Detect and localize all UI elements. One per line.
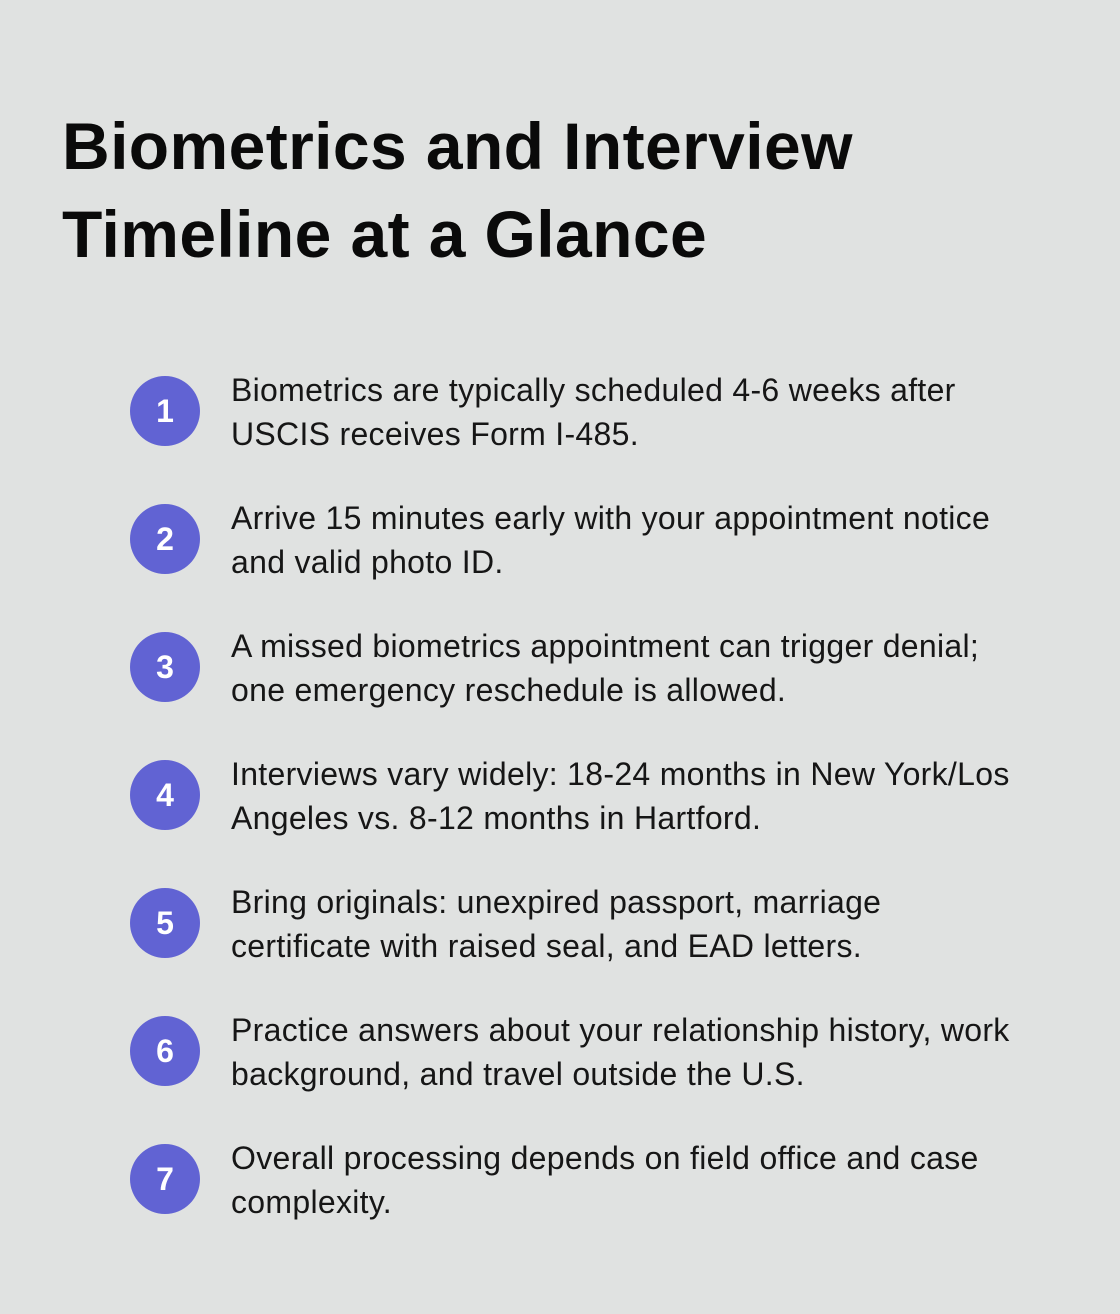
item 6 bbox=[130, 1012, 1010, 1092]
icon: number 6: 6 bbox=[156, 1033, 174, 1069]
icon: number 3: 3 bbox=[156, 649, 174, 685]
item 7: complexity. bbox=[231, 1184, 392, 1220]
item 7: Overall processing depends on field office and case bbox=[231, 1140, 979, 1176]
icon: number 5 bbox=[130, 888, 200, 958]
item 2: and valid photo ID. bbox=[231, 544, 504, 580]
item 1: Biometrics are typically scheduled 4-6 weeks after bbox=[231, 372, 956, 408]
icon: number 4 bbox=[130, 760, 200, 830]
item 4: Interviews vary widely: 18-24 months in New York/Los bbox=[231, 756, 1010, 792]
item 5: Bring originals: unexpired passport, marriage bbox=[231, 884, 881, 920]
item 3 bbox=[130, 628, 979, 708]
item 4: Angeles vs. 8-12 months in Hartford. bbox=[231, 800, 761, 836]
item 5: certificate with raised seal, and EAD letters. bbox=[231, 928, 862, 964]
item 3: A missed biometrics appointment can trigger denial; bbox=[231, 628, 979, 664]
item 3: one emergency reschedule is allowed. bbox=[231, 672, 786, 708]
item 6: Practice answers about your relationship history, work bbox=[231, 1012, 1010, 1048]
icon: number 4: 4 bbox=[156, 777, 174, 813]
icon: number 7: 7 bbox=[156, 1161, 174, 1197]
icon: number 7 bbox=[130, 1144, 200, 1214]
item 2 bbox=[130, 500, 990, 580]
item 1: USCIS receives Form I-485. bbox=[231, 416, 639, 452]
item 5 bbox=[130, 884, 881, 964]
icon: number 2 bbox=[130, 504, 200, 574]
title: Biometrics and Interview bbox=[62, 109, 853, 183]
title bbox=[62, 109, 853, 271]
icon: number 1 bbox=[130, 376, 200, 446]
icon: number 5: 5 bbox=[156, 905, 174, 941]
title: Timeline at a Glance bbox=[62, 197, 707, 271]
item 1 bbox=[130, 372, 956, 452]
icon: number 3 bbox=[130, 632, 200, 702]
icon: number 6 bbox=[130, 1016, 200, 1086]
item 2: Arrive 15 minutes early with your appointment notice bbox=[231, 500, 990, 536]
item 4 bbox=[130, 756, 1010, 836]
icon: number 1: 1 bbox=[156, 393, 174, 429]
item 6: background, and travel outside the U.S. bbox=[231, 1056, 805, 1092]
item 7 bbox=[130, 1140, 979, 1220]
icon: number 2: 2 bbox=[156, 521, 174, 557]
